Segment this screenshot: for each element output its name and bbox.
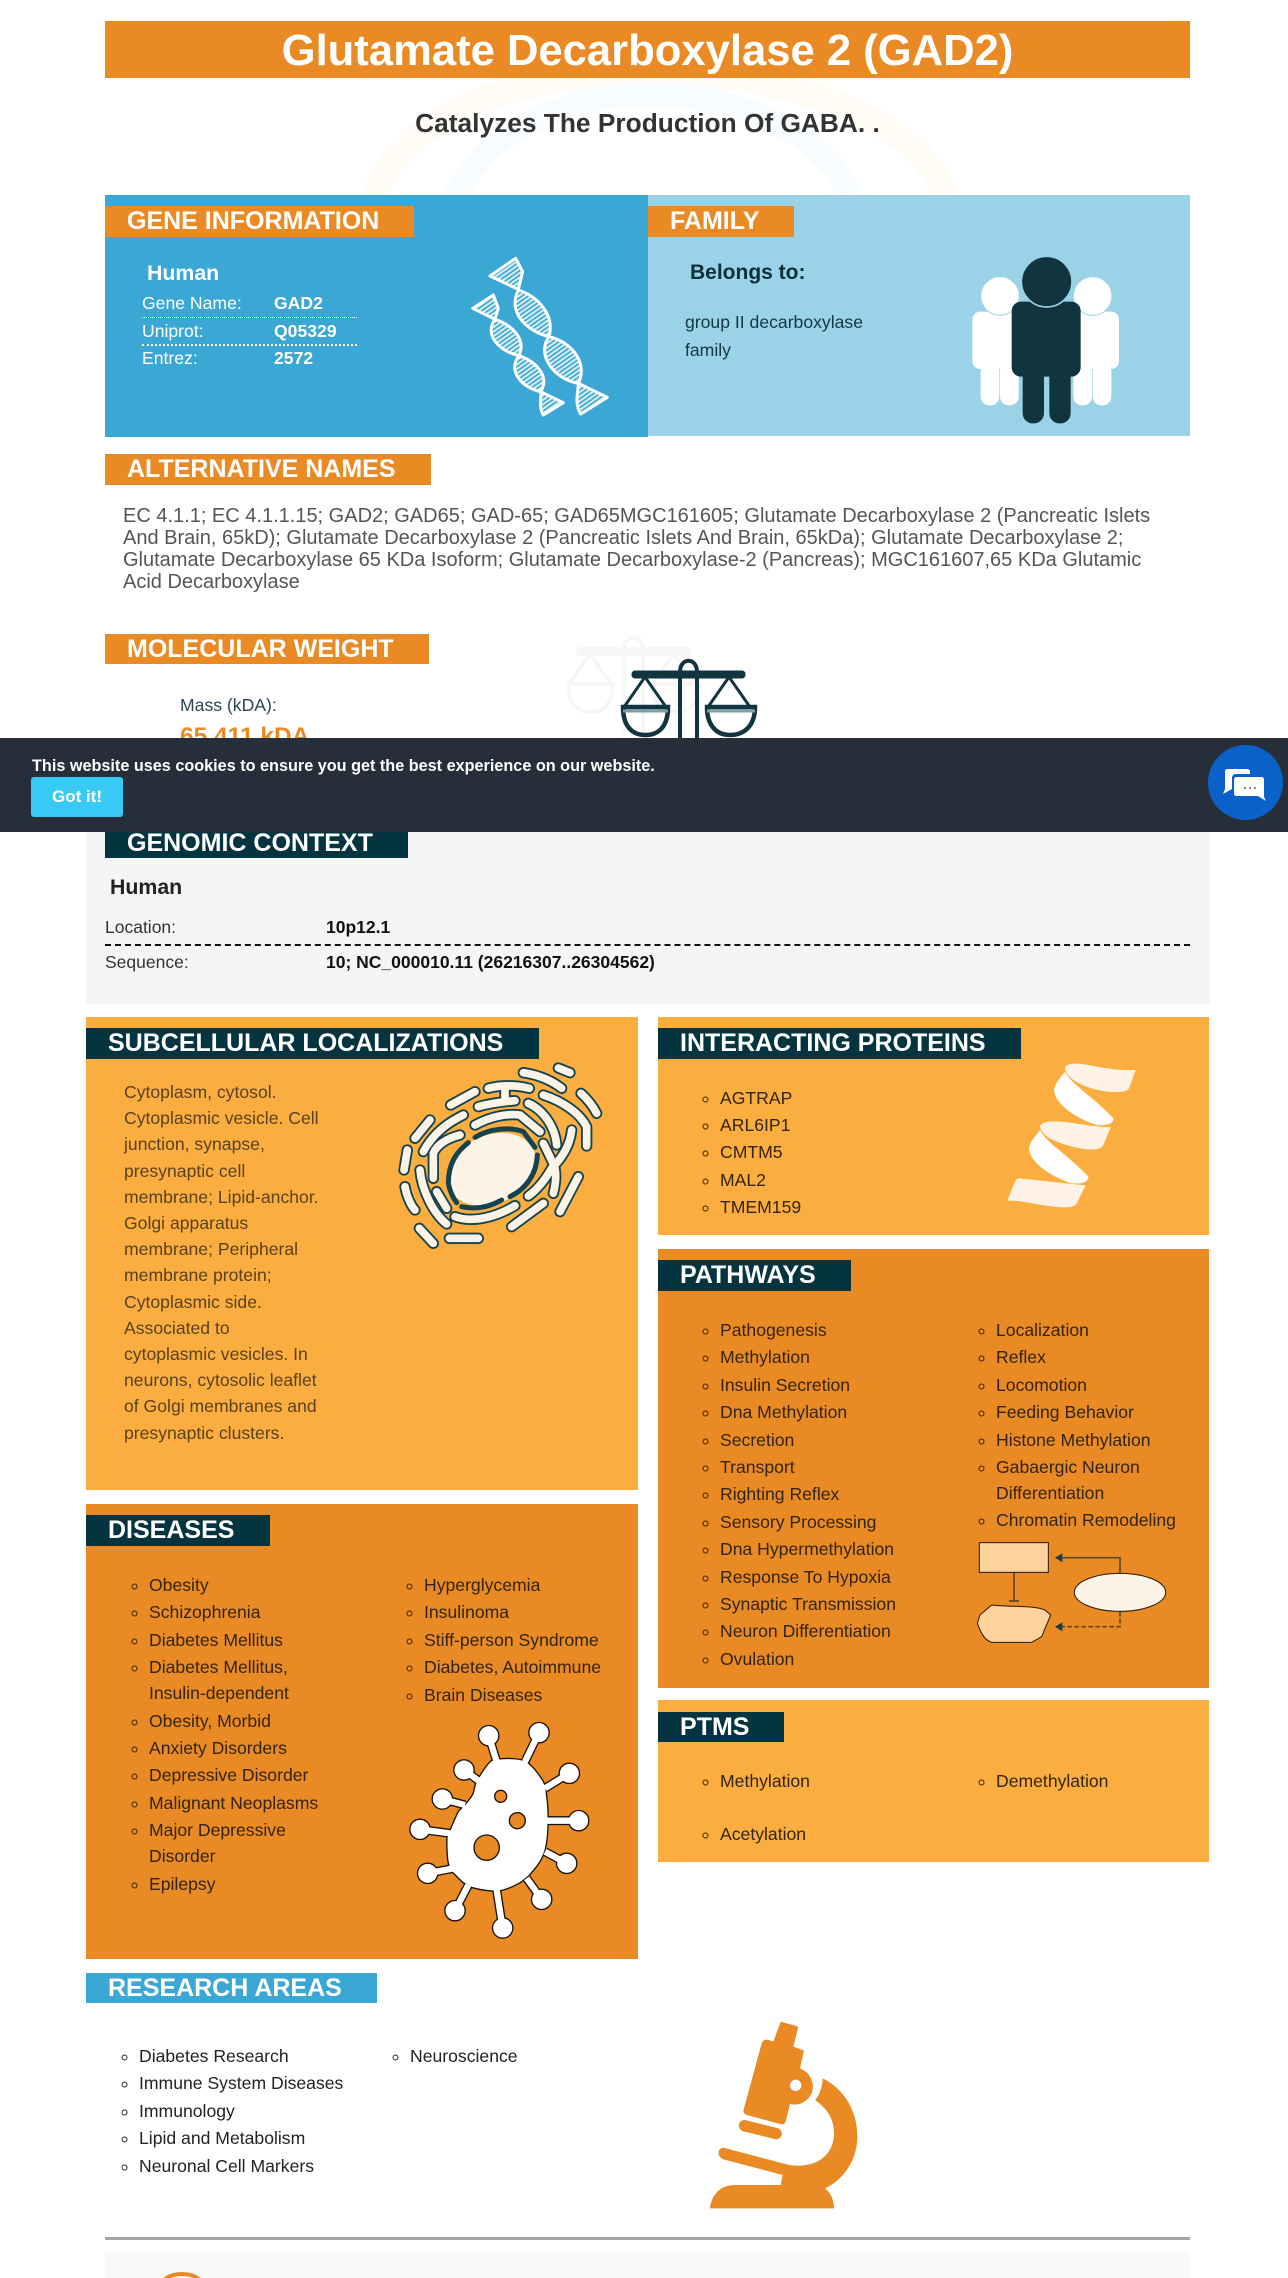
list: diseases column one: Anxiety Disorders [149,1738,287,1758]
list: pathways column one: Dna Hypermethylation [720,1539,894,1559]
text: localization description: presynaptic clusters. [124,1423,284,1443]
list: pathways column one: Response To Hypoxia [720,1567,891,1587]
text: alternative names: EC 4.1.1; EC 4.1.1.15; GAD2; GAD65; GAD-65; GAD65MGC161605; Glutamate Decarboxylase 2 (Pancreatic Islets [123,505,1150,527]
list: pathways column one: Insulin Secretion [720,1375,850,1395]
list: diseases column one: Diabetes Mellitus, [149,1657,288,1677]
panel: family [648,195,1190,436]
list: pathways column two: Chromatin Remodeling [996,1510,1176,1530]
text: localization description: Cytoplasmic vesicle. Cell [124,1108,319,1128]
text: localization description: junction, synapse, [124,1134,265,1154]
text: family name [685,312,863,360]
list: pathways column one: Secretion [720,1430,794,1450]
list: diseases column one: Epilepsy [149,1874,216,1894]
list: diseases column one: Depressive Disorder [149,1765,308,1785]
list: pathways column one: Neuron Differentiation [720,1621,891,1641]
icon: footer logo [164,2272,200,2278]
list: methylation: Methylation [720,1771,810,1791]
list: research areas column two: Neuroscience [410,2046,518,2066]
heading: diseases: DISEASES [108,1516,234,1544]
heading: genomic context: GENOMIC CONTEXT [127,829,373,857]
list: pathways column one [702,1320,896,1669]
text: location row: 10p12.1 [326,917,390,937]
text: organism human: Human [110,875,182,899]
list: diseases column one: Disorder [149,1846,215,1866]
panel: post-translational modifications [658,1700,1209,1862]
list: diseases column one: Schizophrenia [149,1602,260,1622]
heading: subcellular localizations: SUBCELLULAR LOCALIZATIONS [108,1029,503,1057]
text: localization description: Associated to [124,1318,230,1338]
list: diseases column one: Malignant Neoplasms [149,1793,318,1813]
text: localization description: membrane; Peripheral [124,1239,298,1259]
text: cookie notice: This website uses cookies to ensure you get the best experience on our website. [32,757,655,775]
text: localization description: neurons, cytosolic leaflet [124,1370,317,1390]
text: localization description: presynaptic cell [124,1161,245,1181]
table: gene identifiers: Uniprot: [142,321,204,341]
list: interacting proteins: TMEM159 [720,1197,801,1217]
list: pathways column two: Differentiation [996,1483,1104,1503]
icon: dna helix [471,256,609,417]
list: pathways column two: Reflex [996,1347,1046,1367]
list: research areas column one: Immunology [139,2101,235,2121]
text: alternative names: Acid Decarboxylase [123,571,300,593]
text: localization description: of Golgi membranes and [124,1396,317,1416]
heading: ptms: PTMS [680,1713,749,1741]
heading: pathways [658,1260,851,1291]
text: location row: Location: [105,917,176,937]
button: got it: Got it! [52,787,102,806]
heading: alternative names: ALTERNATIVE NAMES [127,455,396,483]
icon: endoplasmic reticulum and nucleus [398,1062,602,1249]
heading: research areas: RESEARCH AREAS [108,1974,342,2002]
panel: pathways [658,1249,1209,1688]
list: diseases column two: Stiff-person Syndrome [424,1630,599,1650]
panel: gene information [105,195,648,437]
panel: footer [105,2252,1190,2278]
list: pathways column one: Dna Methylation [720,1402,847,1422]
list: diseases column one: Obesity [149,1575,209,1595]
text: sequence row: 10; NC_000010.11 (26216307..26304562) [326,952,655,972]
panel: diseases [86,1504,638,1959]
title banner: Glutamate Decarboxylase 2 (GAD2) [282,27,1013,75]
icon: protein helix ribbon [1007,1064,1136,1208]
icon: balance scale [566,636,758,738]
list: pathways column one: Transport [720,1457,795,1477]
list: research areas column one: Diabetes Research [139,2046,289,2066]
button: got it [31,777,123,817]
text: family name: family [685,340,731,360]
background watermark [363,78,957,195]
heading: ptms [658,1712,784,1742]
list: pathways column one: Pathogenesis [720,1320,827,1340]
table: gene identifiers: Entrez: [142,348,198,368]
text: localization description: Golgi apparatus [124,1213,248,1233]
list: diseases column two: Brain Diseases [424,1685,542,1705]
list: pathways column one: Synaptic Transmission [720,1594,896,1614]
text: localization description: membrane; Lipid-anchor. [124,1187,319,1207]
cookie banner [0,738,1288,832]
list: interacting proteins [702,1088,801,1217]
list: pathways column one: Sensory Processing [720,1512,876,1532]
list: pathways column one: Righting Reflex [720,1484,839,1504]
text: localization description: membrane protein; [124,1265,272,1285]
table: gene identifiers: Gene Name: [142,293,242,313]
list: research areas column one: Immune System Diseases [139,2073,343,2093]
list: pathways column one: Methylation [720,1347,810,1367]
text: sequence row [105,952,655,972]
text: mass label: Mass (kDA): [180,695,277,715]
heading: interacting proteins: INTERACTING PROTEINS [680,1029,986,1057]
text: localization description: Cytoplasm, cytosol. [124,1082,277,1102]
text: localization description: cytoplasmic vesicles. In [124,1344,308,1364]
title banner [105,21,1190,78]
list: diseases column two [406,1575,601,1705]
list: interacting proteins: MAL2 [720,1170,766,1190]
text: alternative names: And Brain, 65kD); Glutamate Decarboxylase 2 (Pancreatic Islets And Brain, 65kDa); Glutamate Decarboxylase 2; [123,527,1123,549]
list: pathways column two: Gabaergic Neuron [996,1457,1140,1477]
list: diseases column two: Hyperglycemia [424,1575,540,1595]
table: gene identifiers [142,293,357,368]
table: gene identifiers: Q05329 [274,321,337,341]
icon: pathway diagram [976,1542,1166,1643]
list: pathways column two: Locomotion [996,1375,1087,1395]
table: gene identifiers: GAD2 [274,293,323,313]
list: pathways column two: Localization [996,1320,1089,1340]
list: research areas column one [122,2046,343,2176]
heading: gene information: GENE INFORMATION [127,207,379,235]
text: organism human: Human [147,261,219,285]
list: diseases column one: Insulin-dependent [149,1683,289,1703]
list: pathways column two: Feeding Behavior [996,1402,1134,1422]
list: interacting proteins: CMTM5 [720,1142,783,1162]
text: alternative names: Glutamate Decarboxylase 65 KDa Isoform; Glutamate Decarboxylase-2 (Pancreas); MGC161607,65 KDa Glutamic [123,549,1141,571]
table: gene identifiers: 2572 [274,348,313,368]
icon: chat button [1208,745,1283,820]
panel: genomic context [86,810,1210,1004]
heading: diseases [86,1515,270,1546]
list: pathways column two: Histone Methylation [996,1430,1151,1450]
heading: family [648,206,794,237]
icon: people group [972,257,1119,424]
text: mass value: 65.411 kDA [180,723,309,750]
icon: virus [409,1722,590,1939]
subtitle: Catalyzes The Production Of GABA. . [415,108,880,138]
list: diseases column two: Diabetes, Autoimmune [424,1657,601,1677]
text: belongs to: Belongs to: [690,261,806,284]
list: demethylation: Demethylation [996,1771,1108,1791]
panel: interacting proteins [658,1017,1209,1235]
divider: footer rule [105,2237,1190,2240]
heading: pathways: PATHWAYS [680,1261,816,1289]
list: interacting proteins: AGTRAP [720,1088,792,1108]
text: localization description: Cytoplasmic side. [124,1292,262,1312]
list: diseases column one [132,1575,318,1894]
list: interacting proteins: ARL6IP1 [720,1115,790,1135]
text: localization description [124,1082,319,1443]
list: research areas column one: Neuronal Cell Markers [139,2156,314,2176]
text: family name: group II decarboxylase [685,312,863,332]
list: diseases column one: Obesity, Morbid [149,1711,271,1731]
list: diseases column one: Diabetes Mellitus [149,1630,283,1650]
list: diseases column two: Insulinoma [424,1602,509,1622]
icon: microscope [710,2022,858,2208]
list: acetylation: Acetylation [720,1824,806,1844]
list: research areas column one: Lipid and Metabolism [139,2128,305,2148]
list: pathways column two [978,1320,1176,1530]
heading: family: FAMILY [670,207,759,235]
heading: molecular weight: MOLECULAR WEIGHT [127,635,394,663]
text: location row [105,917,390,937]
text: alternative names [123,505,1150,593]
panel: subcellular localizations [86,1017,638,1490]
text: sequence row: Sequence: [105,952,189,972]
list: pathways column one: Ovulation [720,1649,794,1669]
list: diseases column one: Major Depressive [149,1820,286,1840]
